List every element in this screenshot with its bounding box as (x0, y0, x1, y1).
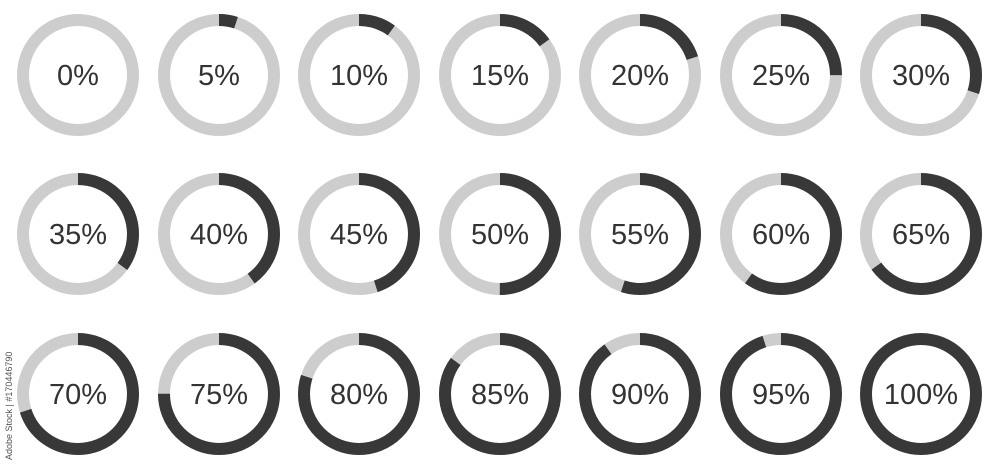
ring 90%: 90% (611, 379, 669, 411)
ring 100% (866, 339, 976, 449)
ring 75%: 75% (190, 379, 248, 411)
ring 25%: 25% (752, 60, 810, 92)
ring 95%: 95% (752, 379, 810, 411)
ring 25% (726, 20, 836, 130)
ring 5%: 5% (198, 60, 240, 92)
ring 45% (304, 179, 414, 289)
ring 20%: 20% (611, 60, 669, 92)
ring 0%: 0% (57, 60, 99, 92)
ring 40% (164, 179, 274, 289)
ring 15% (445, 20, 555, 130)
ring 65% (866, 179, 976, 289)
ring 45%: 45% (330, 219, 388, 251)
ring 95% (726, 339, 836, 449)
ring 55% (585, 179, 695, 289)
ring 0% (23, 20, 133, 130)
ring 50% (445, 179, 555, 289)
ring 5% (164, 20, 274, 130)
ring 60% (726, 179, 836, 289)
ring 55%: 55% (611, 219, 669, 251)
ring 70% (23, 339, 133, 449)
ring 35% (23, 179, 133, 289)
credit text: Adobe Stock | #170446790 (4, 352, 14, 460)
ring 80% (304, 339, 414, 449)
ring 85% (445, 339, 555, 449)
ring 75% (164, 339, 274, 449)
ring 10%: 10% (330, 60, 388, 92)
ring 90% (585, 339, 695, 449)
ring 65%: 65% (892, 219, 950, 251)
ring 10% (304, 20, 414, 130)
ring 70%: 70% (49, 379, 107, 411)
ring 30%: 30% (892, 60, 950, 92)
ring 80%: 80% (330, 379, 388, 411)
ring 30% (866, 20, 976, 130)
ring 50%: 50% (471, 219, 529, 251)
ring 100%: 100% (884, 379, 958, 411)
ring 35%: 35% (49, 219, 107, 251)
ring 15%: 15% (471, 60, 529, 92)
ring 20% (585, 20, 695, 130)
ring 60%: 60% (752, 219, 810, 251)
ring 40%: 40% (190, 219, 248, 251)
ring 85%: 85% (471, 379, 529, 411)
